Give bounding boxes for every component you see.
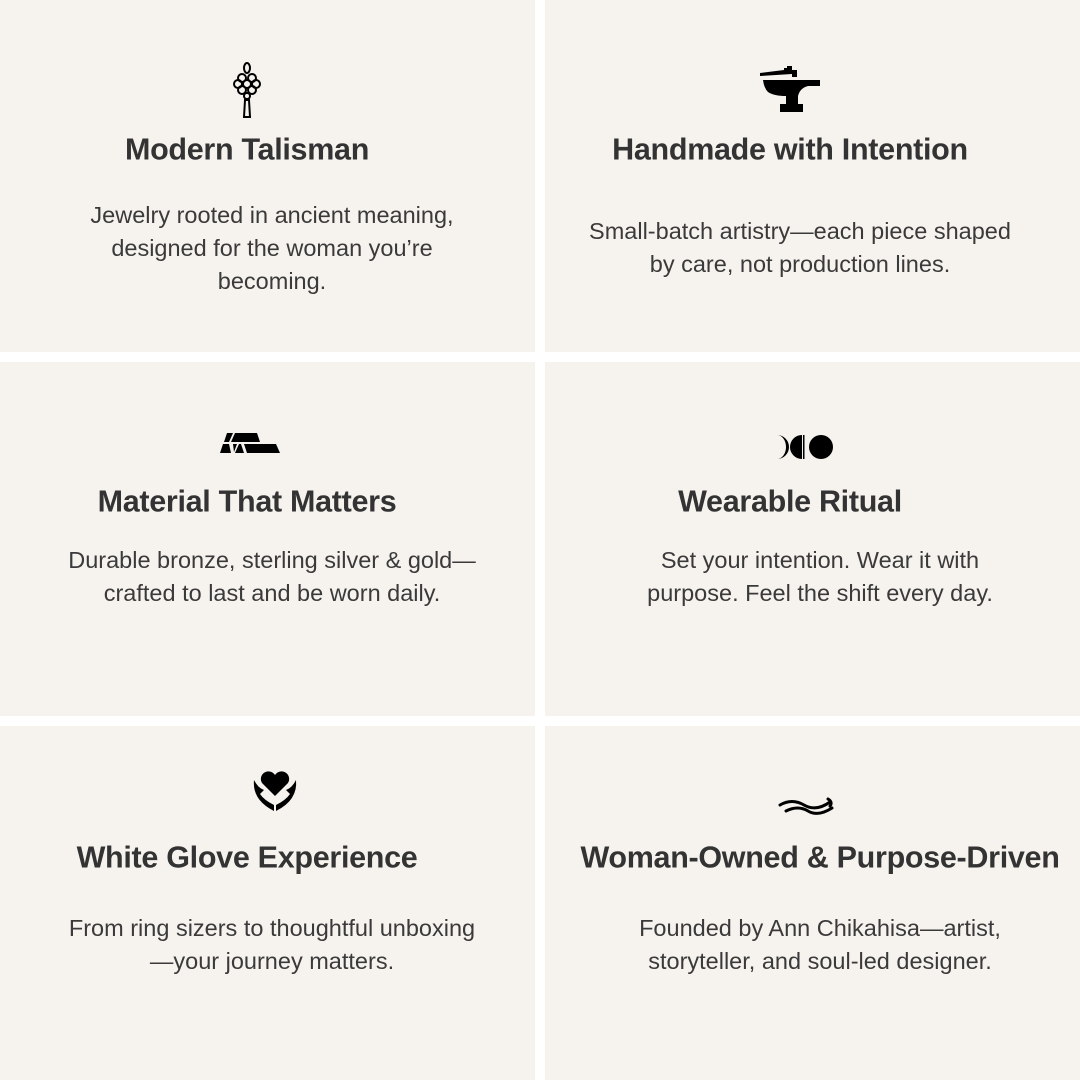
text: white glove (69, 915, 475, 974)
text: woman-owned: storyteller, and soul-led designer. (648, 948, 992, 974)
title: modern talisman: Modern Talisman (125, 132, 369, 166)
panel: ritual (545, 362, 1080, 716)
title: ritual: Wearable Ritual (678, 484, 902, 518)
text: material (68, 547, 476, 606)
text: ritual (647, 547, 993, 606)
panel: white glove (0, 726, 535, 1080)
text: material: Durable bronze, sterling silver & gold— (68, 547, 476, 573)
text: ritual: purpose. Feel the shift every day. (647, 580, 993, 606)
text: woman-owned: Founded by Ann Chikahisa—artist, (639, 915, 1001, 941)
text: modern talisman (90, 202, 454, 294)
text: modern talisman: designed for the woman you’re (111, 235, 433, 261)
icon: waves (778, 797, 834, 815)
text: modern talisman: becoming. (218, 268, 326, 294)
title: woman-owned: Woman-Owned & Purpose-Driven (580, 840, 1060, 874)
text: handmade: by care, not production lines. (650, 251, 950, 277)
icon: anvil (760, 66, 820, 112)
text: handmade (589, 218, 1011, 277)
icon: gold bars (220, 433, 280, 453)
text: modern talisman: Jewelry rooted in ancient meaning, (90, 202, 454, 228)
text: ritual: Set your intention. Wear it with (661, 547, 979, 573)
text: white glove: —your journey matters. (150, 948, 394, 974)
panel: modern talisman (0, 0, 535, 352)
title: material: Material That Matters (98, 484, 396, 518)
text: woman-owned (639, 915, 1001, 974)
text: material: crafted to last and be worn daily. (104, 580, 440, 606)
panel: woman-owned (545, 726, 1080, 1080)
text: white glove: From ring sizers to thoughtful unboxing (69, 915, 475, 941)
panel: material (0, 362, 535, 716)
title: white glove: White Glove Experience (77, 840, 417, 874)
text: handmade: Small-batch artistry—each piece shaped (589, 218, 1011, 244)
icon: endless knot (233, 62, 261, 118)
icon: moon phases (778, 435, 833, 459)
title: handmade: Handmade with Intention (612, 132, 968, 166)
panel: handmade (545, 0, 1080, 352)
icon: heart in hands (254, 771, 296, 811)
